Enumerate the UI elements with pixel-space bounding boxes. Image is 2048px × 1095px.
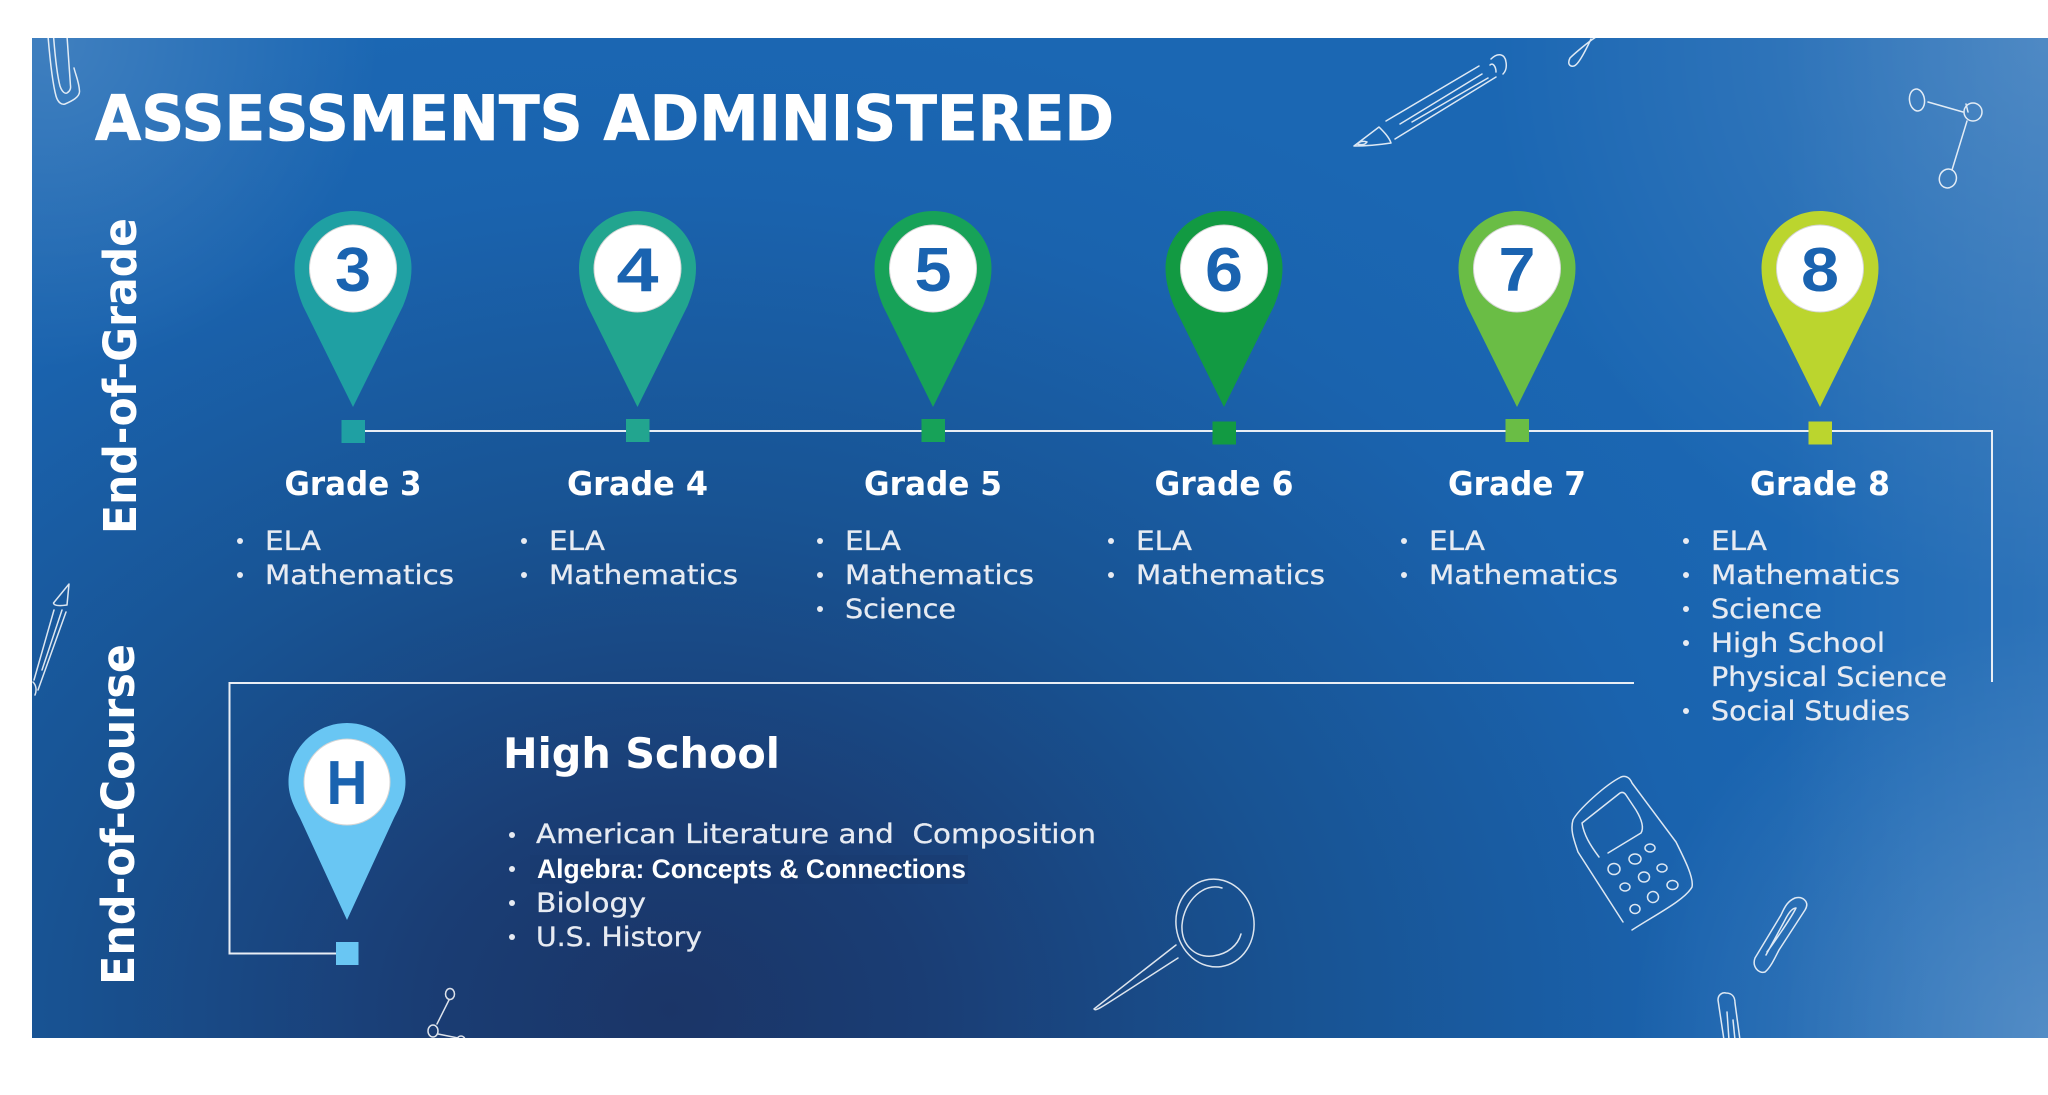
icon: paperclip right bbox=[1754, 898, 1807, 972]
icon: pencil left bbox=[33, 584, 69, 695]
column: grade 4: Mathematics bbox=[549, 560, 738, 591]
column: grade 3: ELA bbox=[265, 526, 321, 557]
panel: high school courses: Biology bbox=[536, 888, 646, 919]
column: grade 4 bbox=[521, 464, 738, 591]
column: grade 5: Grade 5 bbox=[864, 464, 1002, 503]
column: grade 3: Mathematics bbox=[265, 560, 454, 591]
side label: End-of-Course: End-of-Course bbox=[92, 644, 145, 985]
column: grade 6: ELA bbox=[1136, 526, 1192, 557]
pin: grade 4 bbox=[579, 211, 696, 442]
column: grade 8: Physical Science bbox=[1711, 662, 1947, 693]
column: grade 4: Grade 4 bbox=[567, 464, 708, 503]
column: grade 8: High School bbox=[1711, 628, 1885, 659]
panel: high school courses: American Literature and Composition bbox=[536, 819, 1096, 850]
pin: grade 5: 5 bbox=[914, 236, 952, 305]
icon: pencil top bbox=[1354, 55, 1506, 146]
icon: paperclip top left bbox=[48, 36, 80, 104]
column: grade 8: Mathematics bbox=[1711, 560, 1900, 591]
pin: grade 6 bbox=[1166, 211, 1282, 444]
column: grade 5: ELA bbox=[845, 526, 901, 557]
column: grade 6: Grade 6 bbox=[1154, 464, 1294, 503]
icon: molecule top right bbox=[1908, 88, 1982, 190]
pin: grade 6: 6 bbox=[1205, 236, 1243, 305]
side label: End-of-Grade: End-of-Grade bbox=[94, 218, 147, 534]
pin: grade 7: 7 bbox=[1498, 236, 1536, 305]
pin: high school: H bbox=[326, 749, 368, 818]
column: grade 6 bbox=[1108, 464, 1325, 591]
column: grade 7: ELA bbox=[1429, 526, 1485, 557]
column: grade 6: Mathematics bbox=[1136, 560, 1325, 591]
pin: grade 3 bbox=[294, 211, 412, 443]
column: grade 3: Grade 3 bbox=[284, 464, 422, 503]
column: grade 7: Mathematics bbox=[1429, 560, 1618, 591]
column: grade 8: ELA bbox=[1711, 526, 1767, 557]
column: grade 8: Social Studies bbox=[1711, 696, 1910, 727]
panel: high school courses bbox=[503, 729, 1096, 953]
pin: grade 3: 3 bbox=[335, 236, 371, 305]
column: grade 5: Mathematics bbox=[845, 560, 1034, 591]
panel: high school courses: U.S. History bbox=[536, 922, 702, 953]
panel: high school courses: High School bbox=[503, 729, 780, 778]
pin: grade 4: 4 bbox=[616, 236, 659, 305]
column: grade 7 bbox=[1401, 464, 1618, 591]
column: grade 5: Science bbox=[845, 594, 956, 625]
pin: high school bbox=[288, 723, 406, 965]
pin: grade 8: 8 bbox=[1801, 236, 1839, 305]
column: grade 8 bbox=[1683, 464, 1947, 727]
column: grade 8: Science bbox=[1711, 594, 1822, 625]
pin: grade 7 bbox=[1458, 211, 1576, 442]
title: ASSESSMENTS ADMINISTERED bbox=[95, 82, 1114, 155]
icon: magnifying glass bbox=[1094, 874, 1260, 1010]
column: grade 7: Grade 7 bbox=[1448, 464, 1586, 503]
icon: clip fragment top bbox=[1569, 37, 1596, 66]
pin: grade 8 bbox=[1762, 211, 1878, 444]
timeline connector lines bbox=[230, 431, 1992, 954]
icon: paperclip bottom bbox=[1718, 993, 1740, 1040]
column: grade 3 bbox=[237, 464, 454, 591]
column: grade 5 bbox=[817, 464, 1034, 625]
column: grade 4: ELA bbox=[549, 526, 605, 557]
pin: grade 5 bbox=[874, 211, 992, 442]
icon: molecule bottom bbox=[428, 988, 465, 1044]
icon: calculator bbox=[1572, 776, 1692, 930]
panel: high school courses: Algebra: Concepts & Connections bbox=[537, 854, 966, 884]
column: grade 8: Grade 8 bbox=[1750, 464, 1890, 503]
